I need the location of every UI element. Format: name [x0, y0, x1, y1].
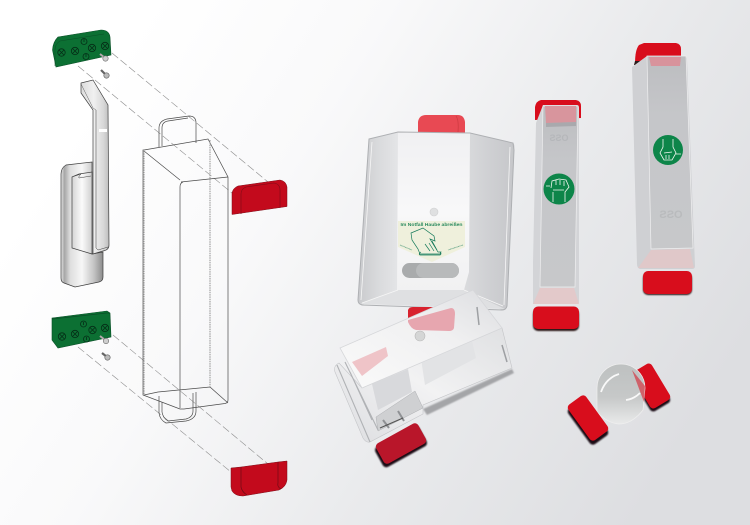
front face: [334, 328, 512, 442]
bracket pocket: [72, 172, 92, 254]
grey slot: [402, 263, 459, 278]
plate holes: [58, 49, 65, 56]
cover body outline: [143, 139, 228, 409]
bottom red end cap: [231, 461, 287, 496]
green sticker: [653, 135, 683, 165]
top face: [340, 290, 502, 388]
inner panel: [540, 106, 578, 287]
pink reflection bottom: [638, 249, 694, 268]
transparent cover (line drawing): [143, 116, 228, 423]
lower tab: [159, 392, 196, 423]
lower glass wall: [360, 290, 505, 309]
bottom green mounting plate: [52, 311, 111, 348]
bottom red cap: [643, 273, 692, 295]
product photo: narrow cover, front left: ƧƧO: [549, 133, 569, 143]
hand icon: [660, 139, 681, 160]
green sticker: [544, 174, 574, 204]
dome: [597, 364, 645, 424]
shadow: [423, 369, 514, 415]
plate holes: [58, 333, 66, 340]
hand icon: [411, 228, 441, 255]
left glass wall: [358, 132, 398, 305]
emergency label: [398, 221, 465, 262]
product photo: wide cover with instruction label: [358, 115, 514, 310]
product photo: narrow cover, rear right: ƧƧO: [659, 209, 683, 221]
bracket back plate: [61, 162, 103, 287]
pink reflection bottom: [533, 288, 579, 304]
dashed assembly guide lines: [78, 53, 268, 472]
pink tab through top: [408, 308, 455, 331]
rear red cap: [630, 365, 672, 413]
product photo: narrow cover, front left: [533, 100, 581, 331]
right glass wall: [464, 133, 514, 310]
white central panel: [397, 132, 470, 290]
red tab behind: [408, 307, 440, 326]
pink reflection top: [649, 57, 681, 66]
glass body: [632, 56, 695, 269]
pink reflection top: [545, 106, 576, 123]
front red cap: [566, 398, 610, 446]
emergency label: Im Notfall Haube abreißen: [400, 222, 463, 228]
bracket front strip: [81, 80, 109, 254]
screws bottom: [100, 336, 110, 360]
top green mounting plate: [52, 30, 111, 67]
moulded dimple: [430, 208, 438, 216]
top red cap: [535, 100, 581, 120]
red cap: [374, 424, 428, 469]
product photo: cover lying on its side: [334, 290, 514, 469]
end face details: [376, 391, 423, 431]
bottom red cap: [533, 309, 579, 331]
top red cap: [635, 43, 681, 63]
dimple: [415, 331, 425, 341]
glass body: [533, 105, 579, 304]
product photo: narrow cover, rear right: [632, 43, 695, 295]
product photo: small dome with red caps: [566, 362, 672, 446]
red tab: [418, 115, 465, 134]
top red end cap: [232, 180, 287, 214]
screws top: [100, 54, 109, 78]
upper tab: [159, 116, 196, 147]
inner panel: [647, 56, 693, 249]
wall bracket (line drawing): [61, 80, 109, 287]
fist icon: [546, 179, 569, 202]
